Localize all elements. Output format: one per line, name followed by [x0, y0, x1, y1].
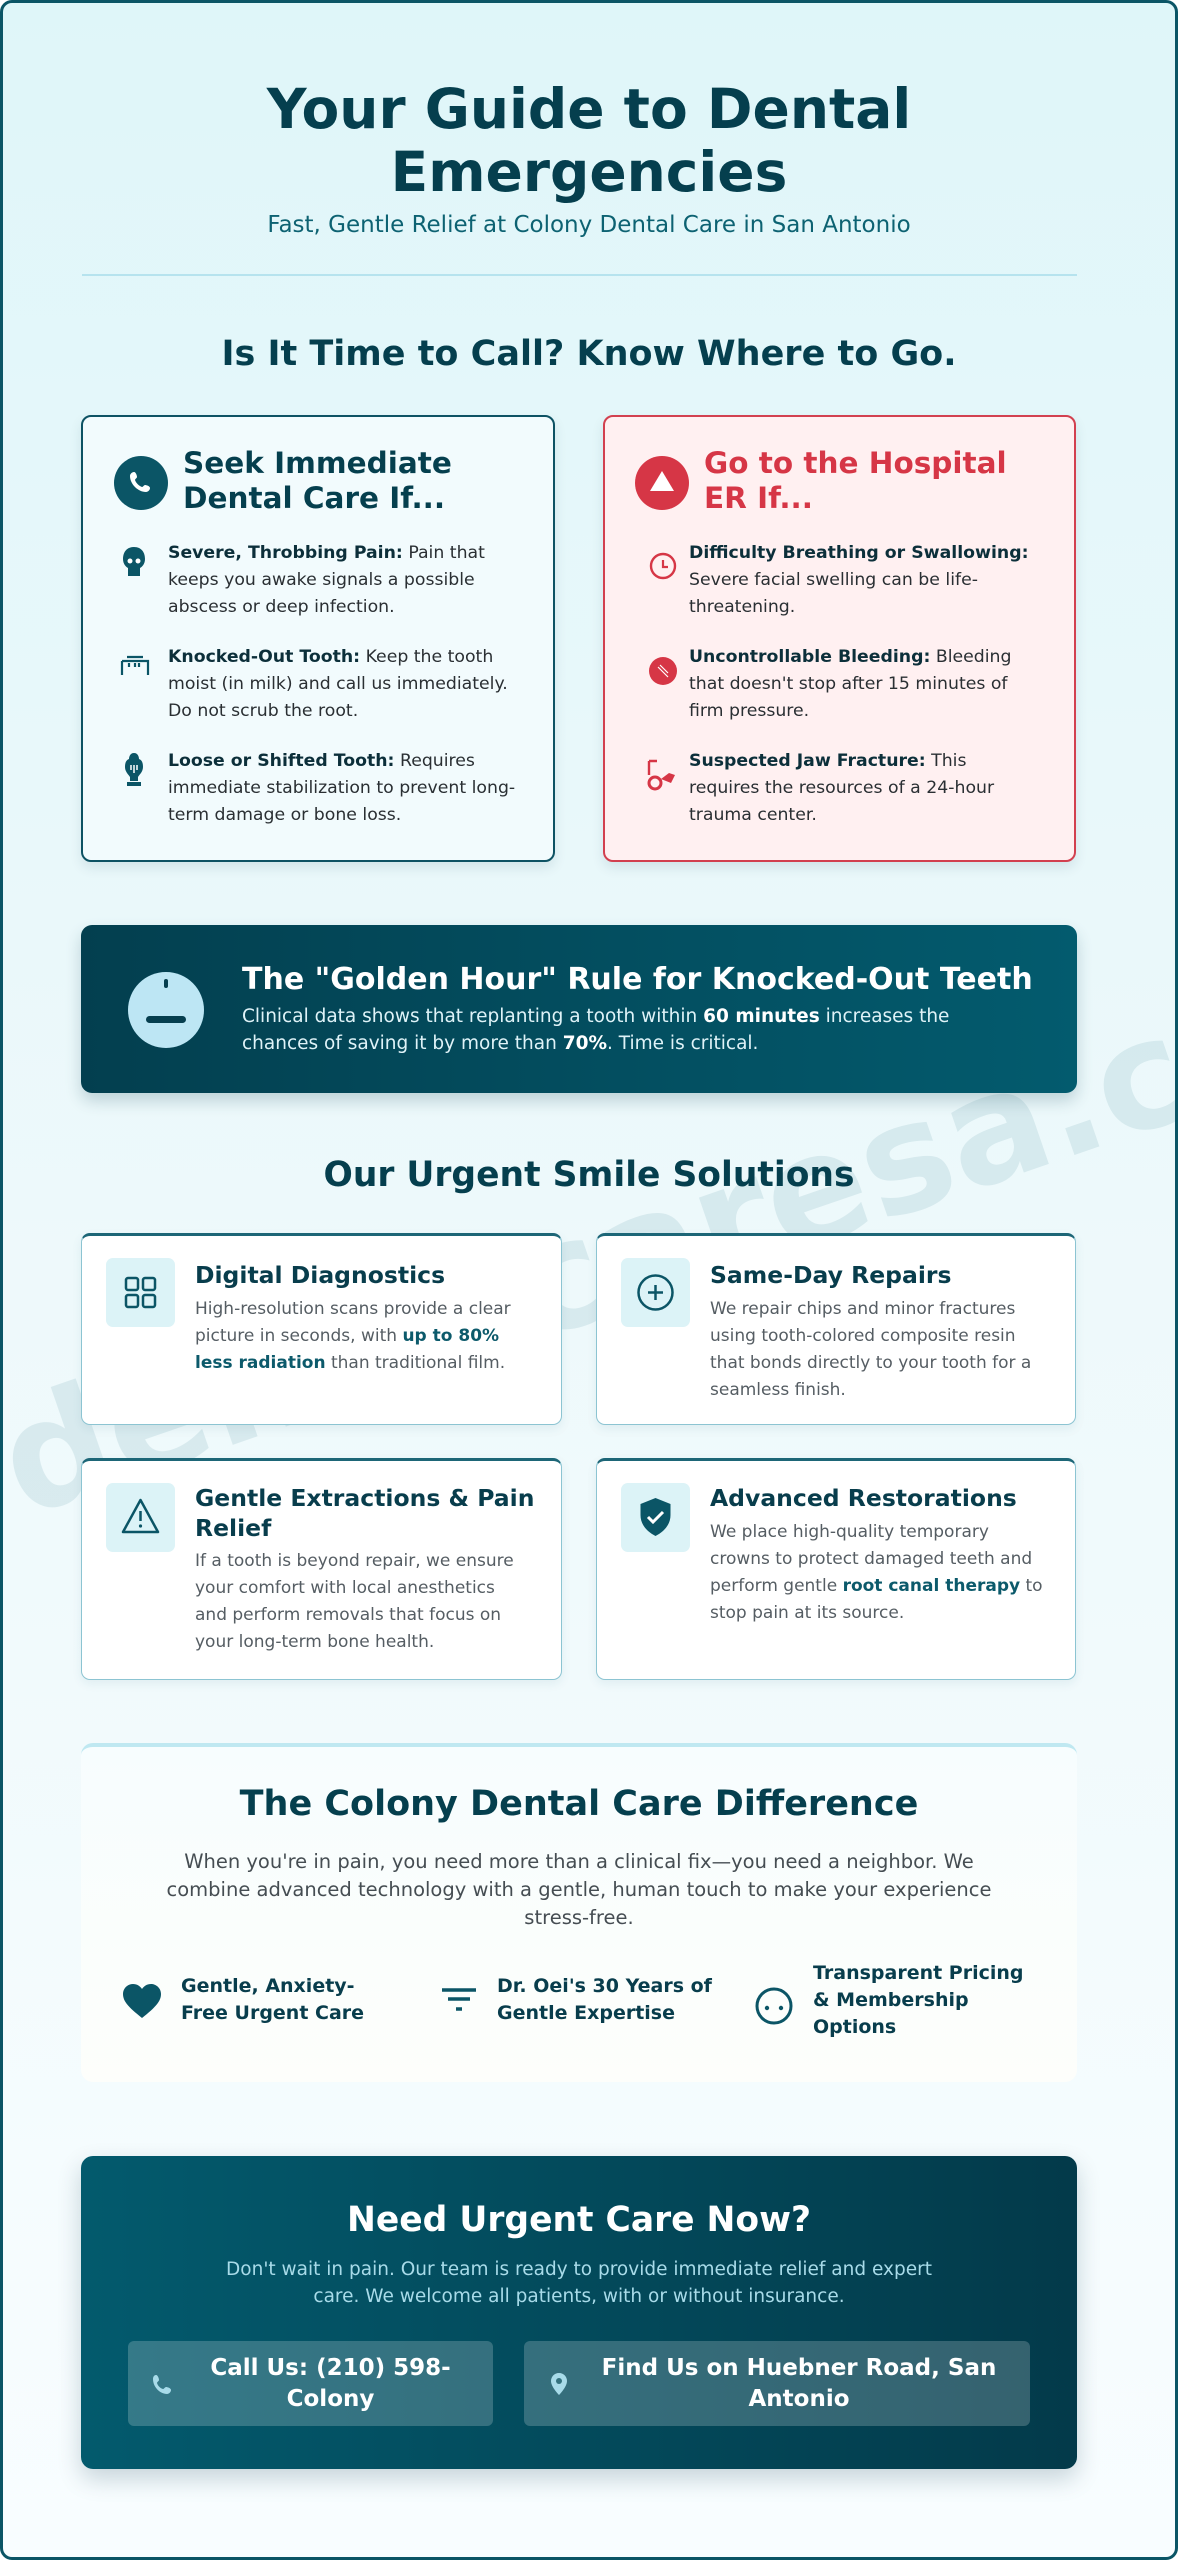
feature: expertise: [442, 1975, 712, 2024]
text: Clinical data shows that replanting a tooth within 60 minutes increases the chances of saving it by more than 70%. Time is critical.: [242, 1006, 949, 1054]
icon: heart: [123, 1984, 161, 2018]
item: pain: Severe, Throbbing Pain: Pain that keeps you awake signals a possible abscess or deep infection.: [168, 543, 485, 617]
icon: phone: [153, 2375, 171, 2394]
card: digital diagnostics: High-resolution scans provide a clear picture in seconds, with up to 80% less radiation than traditional film.: [195, 1299, 511, 1373]
icon: warning: [635, 456, 689, 510]
icon: filter: [442, 1988, 476, 2011]
title: [266, 77, 911, 204]
panel: colony difference: [81, 1743, 1077, 2082]
button: call: Call Us: (210) 598-: [210, 2354, 451, 2380]
heading: is it time to call: Is It Time to Call? Know Where to Go.: [221, 334, 957, 374]
icon: bleeding: [649, 657, 677, 685]
icon: plus: [621, 1258, 690, 1327]
feature: gentle: Gentle, Anxiety-: [181, 1975, 355, 1997]
card: digital diagnostics: Digital Diagnostics: [195, 1261, 445, 1289]
button: call: [128, 2341, 493, 2426]
card: gentle extractions: [81, 1458, 562, 1680]
title: Your Guide to Dental: [267, 77, 911, 141]
item: breathing: Difficulty Breathing or Swallowing: Severe facial swelling can be life-threatening.: [689, 543, 1028, 617]
feature: pricing: & Membership: [813, 1989, 969, 2011]
icon: shield: [621, 1483, 690, 1552]
card: advanced restorations: We place high-quality temporary crowns to protect damaged teeth and perform gentle root canal therapy to stop pain at its source.: [710, 1522, 1043, 1623]
icon: loose tooth: [125, 753, 143, 786]
button: find us: [524, 2341, 1030, 2426]
heading: urgent smile solutions: Our Urgent Smile Solutions: [323, 1155, 854, 1195]
button: find us: Find Us on Huebner Road, San: [602, 2354, 996, 2380]
button: find us: Antonio: [748, 2386, 850, 2412]
icon: stopwatch: [128, 972, 204, 1048]
title: Emergencies: [391, 140, 787, 204]
heading: The "Golden Hour" Rule for Knocked-Out Teeth: [242, 962, 1033, 997]
card: advanced restorations: [596, 1458, 1076, 1680]
feature: pricing: Options: [813, 2016, 896, 2038]
card: same-day repairs: Same-Day Repairs: [710, 1261, 951, 1289]
heading: Need Urgent Care Now?: [347, 2200, 811, 2240]
feature: pricing: [756, 1962, 1024, 2038]
item: knocked-out: Knocked-Out Tooth: Keep the tooth moist (in milk) and call us immediately. Do not scrub the root.: [168, 647, 508, 721]
heading: [183, 446, 452, 515]
icon: alert triangle: [106, 1483, 175, 1552]
panel: go to hospital ER: [603, 415, 1076, 862]
banner: golden hour: [81, 925, 1077, 1093]
card: same-day repairs: We repair chips and minor fractures using tooth-colored composite resin that bonds directly to your tooth for a seamless finish.: [710, 1299, 1031, 1400]
icon: pin: [551, 2373, 567, 2395]
panel: seek immediate dental care: [81, 415, 555, 862]
heading: Go to the Hospital: [704, 446, 1007, 480]
subtitle: Fast, Gentle Relief at Colony Dental Care in San Antonio: [267, 212, 911, 238]
feature: gentle: Free Urgent Care: [181, 2002, 364, 2024]
feature: expertise: Gentle Expertise: [497, 2002, 675, 2024]
icon: clock: [650, 552, 676, 580]
panel: CTA: [81, 2156, 1077, 2469]
text: When you're in pain, you need more than a clinical fix—you need a neighbor. We combine advanced technology with a gentle, human touch to make your experience stress-free.: [167, 1850, 991, 1929]
icon: phone: [114, 456, 168, 510]
feature: expertise: Dr. Oei's 30 Years of: [497, 1975, 712, 1997]
icon: tooth: [120, 656, 150, 675]
card: same-day repairs: [596, 1233, 1076, 1425]
card: gentle extractions: If a tooth is beyond repair, we ensure your comfort with local anesthetics and perform removals that focus on your long-term bone health.: [195, 1551, 514, 1652]
card: gentle extractions: Gentle Extractions & Pain Relief: [195, 1484, 534, 1542]
item: jaw fracture: Suspected Jaw Fracture: This requires the resources of a 24-hour trauma center.: [689, 751, 994, 825]
heading: Dental Care If...: [183, 481, 445, 515]
heading: ER If...: [704, 481, 813, 515]
text: Don't wait in pain. Our team is ready to provide immediate relief and expert care. We welcome all patients, with or without insurance.: [226, 2259, 932, 2307]
item: loose tooth: Loose or Shifted Tooth: Requires immediate stabilization to prevent long-term damage or bone loss.: [168, 751, 515, 825]
feature: gentle: [123, 1975, 364, 2024]
icon: jaw: [648, 760, 675, 790]
icon: pain: [123, 547, 145, 576]
heading: Seek Immediate: [183, 446, 452, 480]
heading: The Colony Dental Care Difference: [240, 1784, 918, 1824]
icon: dots circle: [756, 1988, 792, 2024]
heading: [704, 446, 1007, 515]
item: bleeding: Uncontrollable Bleeding: Bleeding that doesn't stop after 15 minutes of firm pressure.: [689, 647, 1011, 721]
icon: grid: [106, 1258, 175, 1327]
card: digital diagnostics: [81, 1233, 562, 1425]
feature: pricing: Transparent Pricing: [813, 1962, 1024, 1984]
button: call: Colony: [287, 2386, 374, 2412]
card: advanced restorations: Advanced Restorations: [710, 1484, 1017, 1512]
